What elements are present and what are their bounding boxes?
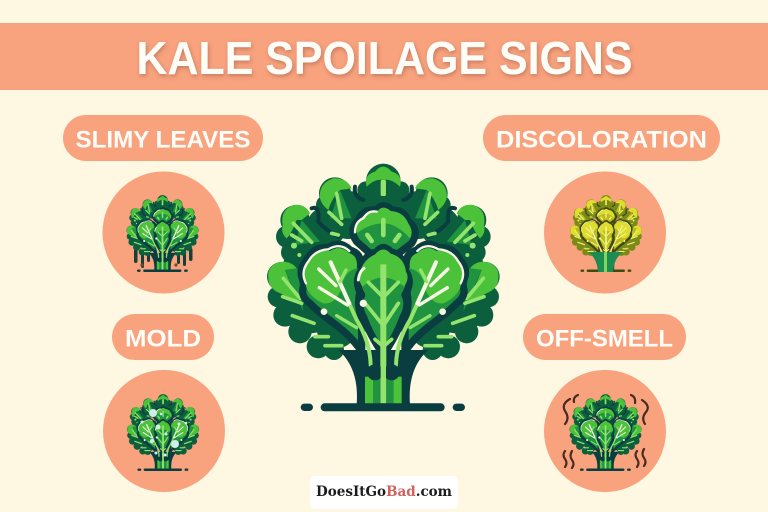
title banner: KALE SPOILAGE SIGNS <box>136 32 632 84</box>
main kale illustration <box>267 164 500 411</box>
footer brand: DoesItGoBad.com <box>316 484 452 500</box>
title banner <box>0 23 768 90</box>
icon: slimy kale <box>102 172 224 294</box>
label: off-smell: OFF-SMELL <box>536 326 673 352</box>
icon: yellowing kale <box>544 172 666 294</box>
panel: slimy leaves <box>63 115 263 294</box>
footer brand <box>310 476 458 509</box>
icon: moldy kale <box>103 370 225 492</box>
icon: smelly kale <box>544 370 666 492</box>
label: off-smell <box>523 314 686 360</box>
label: mold: MOLD <box>125 326 201 352</box>
panel: off-smell <box>523 314 686 492</box>
label: slimy leaves <box>63 115 263 161</box>
panel: discoloration <box>483 115 720 294</box>
label: slimy leaves: SLIMY LEAVES <box>76 126 251 154</box>
label: mold <box>112 314 214 360</box>
label: discoloration: DISCOLORATION <box>496 126 707 154</box>
panel: mold <box>103 314 225 492</box>
label: discoloration <box>483 115 720 161</box>
